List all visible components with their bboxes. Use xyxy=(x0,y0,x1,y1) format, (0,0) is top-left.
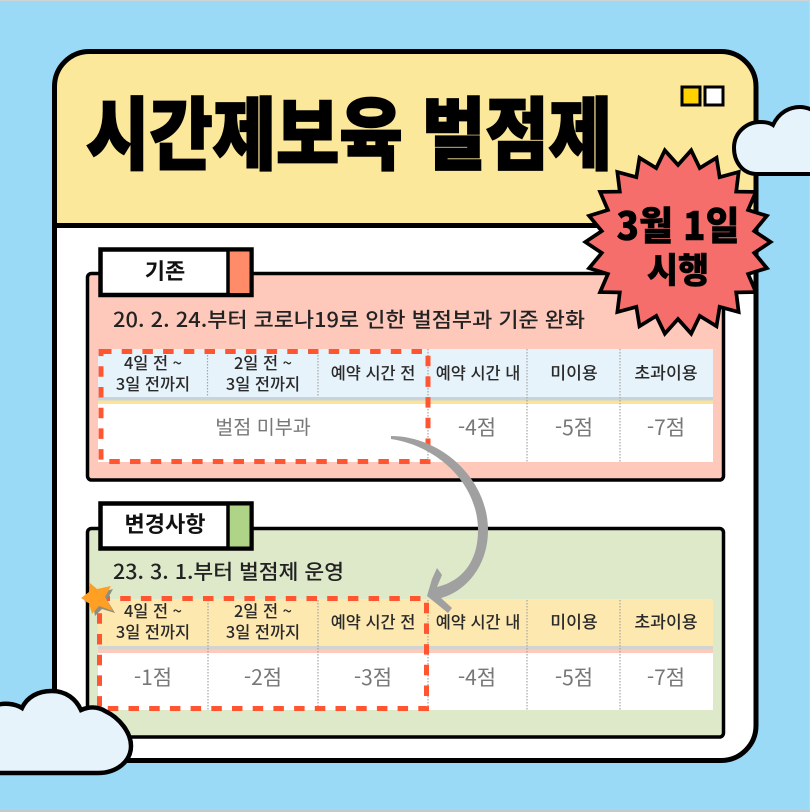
table: new penalties: -4점 xyxy=(458,662,496,692)
tab: changes: 변경사항 xyxy=(125,507,205,539)
table: new penalties: 초과이용 xyxy=(634,608,698,633)
arrow xyxy=(391,436,488,613)
panel: existing rules xyxy=(88,250,724,480)
badge text: date: 3월 1일 xyxy=(616,196,740,252)
table: existing penalties: 예약 시간 내 xyxy=(436,360,520,384)
table: existing penalties: 2일 전 ~ xyxy=(234,350,292,374)
badge text: effective: 시행 xyxy=(647,243,709,294)
table: existing penalties: -4점 xyxy=(458,412,496,442)
tab: changes xyxy=(100,504,252,549)
table: new penalties xyxy=(98,598,713,710)
table: existing penalties: 3일 전까지 xyxy=(226,371,300,395)
icon: star xyxy=(81,583,115,616)
table: new penalties: 4일 전 ~ xyxy=(124,598,182,622)
table: existing penalties xyxy=(98,349,713,462)
tab: existing: 기존 xyxy=(145,254,185,286)
dashed highlight: changes xyxy=(100,598,426,708)
main card xyxy=(54,52,756,760)
table: new penalties: -3점 xyxy=(354,662,392,692)
table: new penalties: 미이용 xyxy=(550,608,598,633)
table: new penalties: 2일 전 ~ xyxy=(234,598,292,622)
table: new penalties: -1점 xyxy=(134,662,172,692)
table: existing penalties: 예약 시간 전 xyxy=(331,360,415,384)
panel description: 23. 3. 1.부터 벌점제 운영 xyxy=(113,555,344,585)
cloud: right xyxy=(734,107,810,174)
table: existing penalties: 4일 전 ~ xyxy=(124,350,182,374)
table: existing penalties: 벌점 미부과 xyxy=(215,411,311,440)
table: new penalties: 3일 전까지 xyxy=(226,619,300,643)
dashed highlight: existing xyxy=(101,352,428,462)
table: new penalties: -7점 xyxy=(647,662,685,692)
table: new penalties: 예약 시간 전 xyxy=(331,609,415,633)
starburst badge xyxy=(585,150,771,334)
table: new penalties: -2점 xyxy=(244,662,282,692)
panel description: 20. 2. 24.부터 코로나19로 인한 벌점부과 기준 완화 xyxy=(113,303,585,333)
cloud: bottom left xyxy=(0,691,131,773)
icon: window squares xyxy=(682,87,723,105)
table: new penalties: 3일 전까지 xyxy=(116,619,190,643)
table: existing penalties: 미이용 xyxy=(550,359,598,384)
table: existing penalties: 초과이용 xyxy=(634,359,698,384)
table: existing penalties: 3일 전까지 xyxy=(116,371,190,395)
table: existing penalties: -7점 xyxy=(647,412,685,442)
tab: existing xyxy=(100,250,252,295)
title: 시간제보육 벌점제 xyxy=(86,71,612,186)
table: new penalties: 예약 시간 내 xyxy=(436,609,520,633)
panel: changes xyxy=(88,504,724,737)
table: existing penalties: -5점 xyxy=(555,412,593,442)
table: new penalties: -5점 xyxy=(555,662,593,692)
